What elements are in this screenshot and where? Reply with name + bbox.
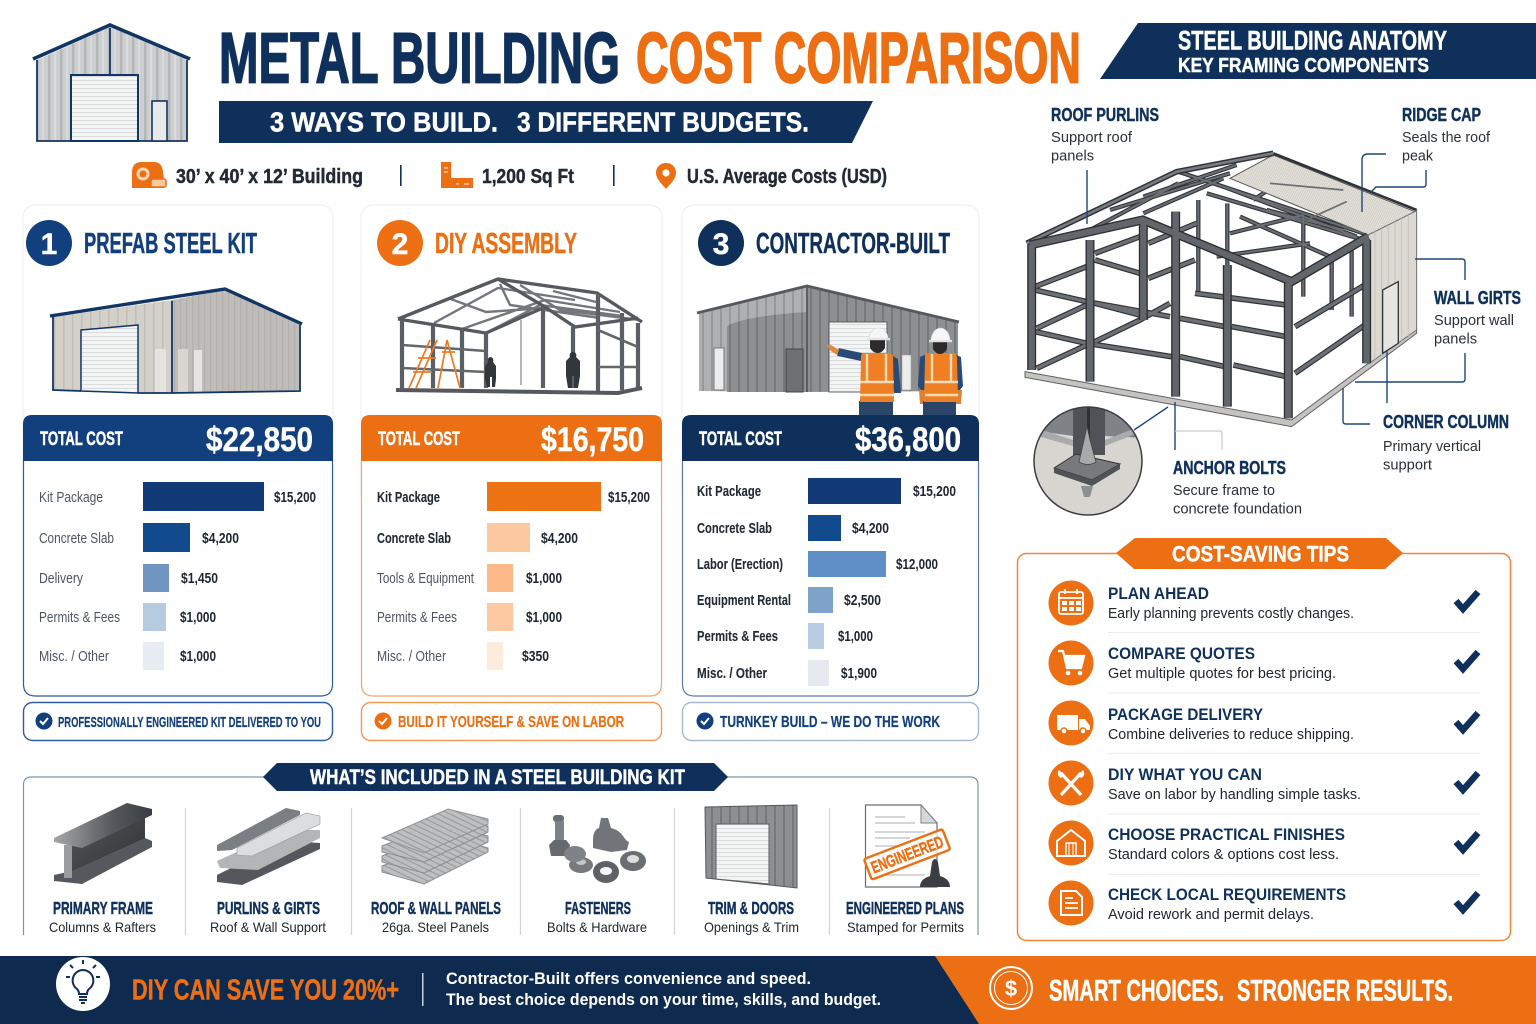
label: corner column [1383, 412, 1509, 474]
leader lines [1087, 154, 1465, 450]
steel building anatomy banner [1100, 23, 1536, 79]
tip: check local requirements: CHECK LOCAL REQUIREMENTS [1108, 886, 1346, 904]
total cost bar: TOTAL COST [40, 429, 123, 450]
tip: check local requirements [1048, 880, 1478, 926]
cost breakdown chart: $350 [522, 649, 549, 665]
concrete slab [1025, 328, 1417, 427]
building specs row: 1,200 Sq Ft [482, 166, 574, 188]
illustration: building with contractors [697, 286, 963, 415]
tip: package delivery: PACKAGE DELIVERY [1108, 706, 1263, 724]
number badge 2 [377, 220, 423, 266]
cost breakdown chart: Permits & Fees [39, 610, 120, 626]
label: ridge cap: Seals the roof [1402, 129, 1491, 146]
cost breakdown chart: Misc. / Other [697, 666, 767, 682]
closing slogan: SMART CHOICES. [1049, 974, 1224, 1008]
label: anchor bolts: ANCHOR BOLTS [1173, 458, 1286, 478]
callout: prefab kit [24, 702, 332, 740]
cost breakdown chart [377, 482, 650, 670]
panel: what's included [24, 763, 978, 935]
detail: anchor bolt [1030, 407, 1146, 515]
tip: package delivery: Combine deliveries to reduce shipping. [1108, 727, 1354, 743]
title [219, 20, 1081, 98]
callout: contractor: TURNKEY BUILD – WE DO THE WORK [720, 714, 941, 731]
item: primary frame: PRIMARY FRAME [53, 898, 153, 918]
tip: choose practical finishes: CHOOSE PRACTICAL FINISHES [1108, 826, 1345, 844]
label: anchor bolts: Secure frame to [1173, 482, 1275, 499]
cost breakdown chart: Misc. / Other [377, 649, 446, 665]
tip: compare quotes: Get multiple quotes for best pricing. [1108, 666, 1336, 682]
cost breakdown chart: $1,000 [526, 571, 562, 587]
cost breakdown chart: Concrete Slab [697, 521, 772, 537]
cost breakdown chart: $1,000 [180, 610, 216, 626]
subtitle banner [219, 101, 873, 143]
cost breakdown chart [697, 478, 956, 686]
tip: choose practical finishes [1048, 820, 1478, 866]
number badge 1: 1 [41, 228, 57, 261]
building specs row [132, 162, 887, 189]
worker pointing [826, 328, 901, 415]
label: anchor bolts [1173, 458, 1302, 518]
label: ridge cap: peak [1402, 148, 1433, 164]
steel building anatomy banner: STEEL BUILDING ANATOMY [1178, 26, 1447, 56]
label: ridge cap [1402, 105, 1491, 164]
heading ribbon [263, 763, 728, 791]
label: anchor bolts: concrete foundation [1173, 500, 1302, 518]
total cost bar: $16,750 [541, 421, 644, 459]
item: roof and wall panels: 26ga. Steel Panels [382, 919, 489, 935]
label: ridge cap: RIDGE CAP [1402, 105, 1481, 125]
label: wall girts: panels [1434, 330, 1477, 348]
cost breakdown chart: $4,200 [852, 521, 889, 537]
tip: package delivery [1048, 700, 1478, 746]
steel building anatomy banner: KEY FRAMING COMPONENTS [1178, 54, 1429, 77]
cost breakdown chart: Permits & Fees [697, 629, 778, 645]
item: fasteners [547, 815, 647, 935]
diagram: steel frame anatomy [1025, 153, 1465, 515]
worker standing [918, 328, 963, 415]
icon: map pin [656, 163, 676, 189]
number badge 3 [698, 220, 744, 266]
cost breakdown chart: $1,000 [526, 610, 562, 626]
cost breakdown chart: $15,200 [274, 490, 316, 506]
cost breakdown chart: $1,900 [841, 666, 877, 682]
total cost bar [682, 415, 979, 461]
item: purlins and girts: Roof & Wall Support [210, 919, 326, 935]
cost breakdown chart: Kit Package [39, 490, 103, 506]
cost breakdown chart: Equipment Rental [697, 593, 791, 609]
cost breakdown chart: Misc. / Other [39, 649, 109, 665]
tip: diy what you can: Save on labor by handling simple tasks. [1108, 787, 1361, 803]
label: roof purlins: ROOF PURLINS [1051, 105, 1159, 125]
panel: diy assembly [361, 205, 662, 696]
cost breakdown chart: Concrete Slab [377, 531, 451, 547]
label: wall girts [1434, 288, 1521, 348]
item: roof and wall panels [371, 809, 501, 935]
item: primary frame: Columns & Rafters [49, 919, 156, 935]
tip: diy what you can [1048, 760, 1478, 806]
item: engineered plans: ENGINEERED [868, 832, 946, 877]
tip: plan ahead [1048, 580, 1478, 626]
heading: PREFAB STEEL KIT [84, 228, 257, 260]
building specs row: 30’ x 40’ x 12’ Building [176, 166, 363, 188]
summary text [446, 970, 881, 1009]
cost breakdown chart: $12,000 [896, 557, 938, 573]
tip: check local requirements: Avoid rework and permit delays. [1108, 907, 1314, 923]
cost breakdown chart [39, 482, 316, 670]
icon: tape measure [132, 162, 166, 188]
cost breakdown chart: $4,200 [541, 531, 578, 547]
cost breakdown chart: Kit Package [697, 484, 761, 500]
cost breakdown chart: Permits & Fees [377, 610, 457, 626]
panel: prefab steel kit [23, 205, 333, 696]
item: engineered plans: Stamped for Permits [847, 919, 964, 935]
callout: prefab kit: PROFESSIONALLY ENGINEERED KIT DELIVERED TO YOU [58, 714, 321, 731]
callout: diy [362, 702, 662, 740]
item: primary frame [49, 803, 156, 935]
total cost bar: $22,850 [206, 421, 313, 459]
item: trim and doors [704, 805, 799, 935]
callout: diy: BUILD IT YOURSELF & SAVE ON LABOR [398, 714, 624, 731]
number badge 3: 3 [713, 228, 729, 261]
tip: plan ahead: PLAN AHEAD [1108, 585, 1209, 603]
roof panels [1230, 155, 1415, 235]
subtitle banner: 3 WAYS TO BUILD. [270, 106, 498, 138]
total cost bar: $36,800 [855, 421, 961, 459]
title: COST COMPARISON [636, 20, 1081, 98]
cost breakdown chart: $4,200 [202, 531, 239, 547]
bottom banner [0, 956, 1536, 1024]
illustration: steel frame with ladder and workers [396, 279, 642, 393]
number badge 1 [26, 220, 72, 266]
cost breakdown chart: $1,450 [181, 571, 218, 587]
icon: dollar coin: $ [1005, 976, 1017, 1001]
subtitle banner: 3 DIFFERENT BUDGETS. [517, 106, 809, 138]
tip: diy what you can: DIY WHAT YOU CAN [1108, 766, 1262, 784]
label: corner column: support [1383, 456, 1433, 474]
closing slogan [1049, 974, 1453, 1008]
tip: compare quotes [1048, 640, 1478, 686]
wall panels [1368, 211, 1417, 364]
item: purlins and girts: PURLINS & GIRTS [217, 898, 320, 918]
icon: metal building [33, 25, 190, 141]
illustration: prefab building [50, 289, 302, 393]
cost breakdown chart: $1,000 [838, 629, 873, 645]
cost breakdown chart: Kit Package [377, 490, 440, 506]
cost breakdown chart: Delivery [39, 571, 84, 587]
heading ribbon: COST-SAVING TIPS [1172, 542, 1349, 566]
total cost bar: TOTAL COST [378, 429, 460, 450]
cost breakdown chart: Concrete Slab [39, 531, 114, 547]
item: roof and wall panels: ROOF & WALL PANELS [371, 898, 501, 918]
tip: compare quotes: COMPARE QUOTES [1108, 645, 1255, 663]
total cost bar [361, 415, 662, 461]
label: roof purlins: Support roof [1051, 129, 1133, 146]
icon: light bulb [56, 957, 110, 1011]
panel: contractor-built [682, 205, 979, 696]
total cost bar: TOTAL COST [699, 429, 782, 450]
cost breakdown chart: Labor (Erection) [697, 557, 783, 573]
label: roof purlins [1051, 105, 1159, 164]
cost breakdown chart: $15,200 [608, 490, 650, 506]
item: engineered plans [846, 805, 964, 935]
cost breakdown chart: $1,000 [180, 649, 216, 665]
icon: carpenter square [441, 162, 473, 188]
total cost bar [23, 415, 333, 461]
summary text: Contractor-Built offers convenience and speed. [446, 970, 811, 988]
heading: DIY ASSEMBLY [435, 228, 577, 260]
icon: dollar coin [990, 967, 1032, 1009]
heading ribbon: WHAT’S INCLUDED IN A STEEL BUILDING KIT [310, 766, 685, 789]
callout: contractor [682, 702, 978, 740]
cost breakdown chart: $15,200 [913, 484, 956, 500]
building specs row: U.S. Average Costs (USD) [687, 166, 887, 188]
summary text: The best choice depends on your time, skills, and budget. [446, 991, 881, 1009]
item: fasteners: Bolts & Hardware [547, 919, 647, 935]
savings headline: DIY CAN SAVE YOU 20%+ [132, 974, 399, 1006]
label: roof purlins: panels [1051, 148, 1094, 164]
label: wall girts: Support wall [1434, 312, 1514, 329]
panel: cost-saving tips [1018, 538, 1510, 940]
cost breakdown chart: $2,500 [844, 593, 881, 609]
item: trim and doors: TRIM & DOORS [708, 898, 794, 918]
cost breakdown chart: Tools & Equipment [377, 571, 474, 587]
item: purlins and girts [210, 808, 326, 935]
item: fasteners: FASTENERS [565, 898, 631, 918]
tip: choose practical finishes: Standard colors & options cost less. [1108, 847, 1339, 863]
heading ribbon [1116, 538, 1403, 569]
item: engineered plans: ENGINEERED PLANS [846, 898, 964, 918]
title: METAL BUILDING [219, 20, 620, 98]
tip: plan ahead: Early planning prevents costly changes. [1108, 606, 1354, 622]
item: trim and doors: Openings & Trim [704, 919, 799, 935]
number badge 2: 2 [392, 228, 408, 261]
label: corner column: Primary vertical [1383, 438, 1481, 455]
heading: CONTRACTOR-BUILT [756, 228, 950, 260]
